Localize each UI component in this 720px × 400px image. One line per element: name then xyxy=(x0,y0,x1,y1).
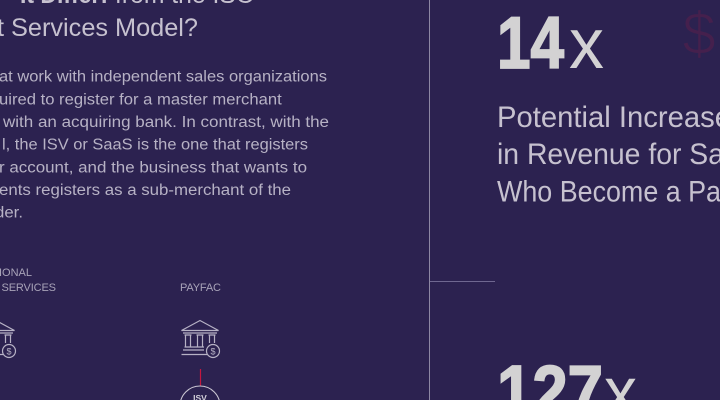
body text: with an acquiring bank. In contrast, with the xyxy=(2,114,329,131)
body text: l, the ISV or SaaS is the one that registers xyxy=(2,137,308,154)
label: payfac: PAYFAC xyxy=(180,282,221,294)
label: traditional merchant services xyxy=(0,267,56,294)
stat: 14x: 14 xyxy=(497,3,564,84)
icon: bank left xyxy=(0,320,16,358)
body text: ents registers as a sub-merchant of the xyxy=(0,182,291,199)
heading: left panel xyxy=(0,0,255,42)
icon: dollar sign: $ xyxy=(682,0,716,67)
icon: bank left: $ xyxy=(6,346,12,356)
icon: bank payfac: $ xyxy=(210,346,216,356)
body text: uired to register for a master merchant xyxy=(0,91,282,108)
body text: r account, and the business that wants to xyxy=(0,159,307,176)
body text: at work with independent sales organizations xyxy=(0,69,327,86)
body text xyxy=(0,69,329,222)
stat description xyxy=(497,101,720,208)
icon: ISV circle xyxy=(180,386,220,400)
stat: 14x: x xyxy=(569,5,604,84)
heading: left panel: t Services Model? xyxy=(0,14,198,42)
label: traditional merchant services: SERVICES xyxy=(2,282,56,294)
icon: bank payfac xyxy=(182,320,220,358)
connector: red line xyxy=(200,369,202,386)
